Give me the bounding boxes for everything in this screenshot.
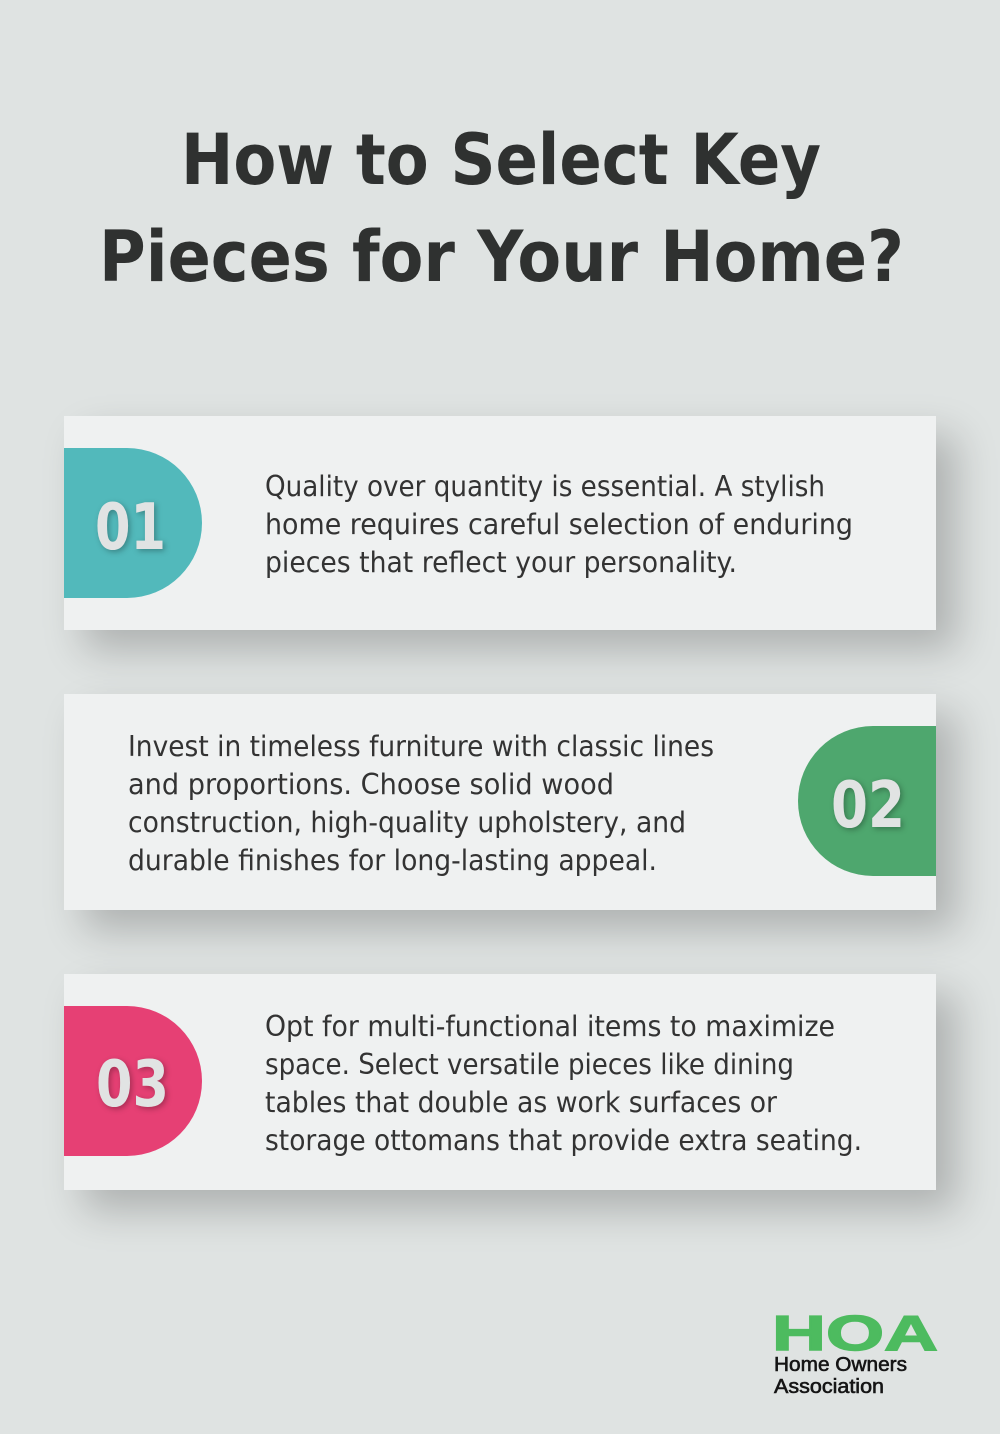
panel: step 01 [64, 416, 936, 630]
badge: 01 [64, 448, 202, 598]
logo: HOA Home Owners Association: Association [774, 1376, 884, 1398]
text: step 02 description: Invest in timeless furniture with classic lines [128, 730, 714, 763]
text: step 03 description: Opt for multi-functional items to maximize [265, 1010, 835, 1043]
badge: 03 [64, 1006, 202, 1156]
panel: step 03 [64, 974, 936, 1190]
text: step 03 description: storage ottomans that provide extra seating. [265, 1124, 862, 1157]
badge: 01: 01 [95, 491, 166, 565]
text: step 01 description: pieces that reflect your personality. [265, 546, 737, 579]
text: step 02 description: construction, high-quality upholstery, and [128, 806, 686, 839]
text: step 02 description: durable finishes for long-lasting appeal. [128, 844, 657, 877]
text: step 03 description: tables that double as work surfaces or [265, 1086, 777, 1119]
badge: 02: 02 [831, 769, 905, 843]
badge: 02 [798, 726, 936, 876]
text: step 03 description [265, 1010, 862, 1157]
logo: HOA Home Owners Association [772, 1310, 938, 1398]
logo: HOA Home Owners Association: Home Owners [774, 1354, 907, 1376]
panel: step 02 [64, 694, 936, 910]
text: step 01 description [265, 470, 853, 579]
badge: 03: 03 [96, 1048, 169, 1122]
text: step 02 description: and proportions. Choose solid wood [128, 768, 614, 801]
title: How to Select Key [181, 119, 821, 201]
text: step 03 description: space. Select versatile pieces like dining [265, 1048, 794, 1081]
text: step 01 description: Quality over quantity is essential. A stylish [265, 470, 825, 503]
text: step 02 description [128, 730, 714, 877]
title [99, 119, 904, 298]
text: step 01 description: home requires careful selection of enduring [265, 508, 853, 541]
